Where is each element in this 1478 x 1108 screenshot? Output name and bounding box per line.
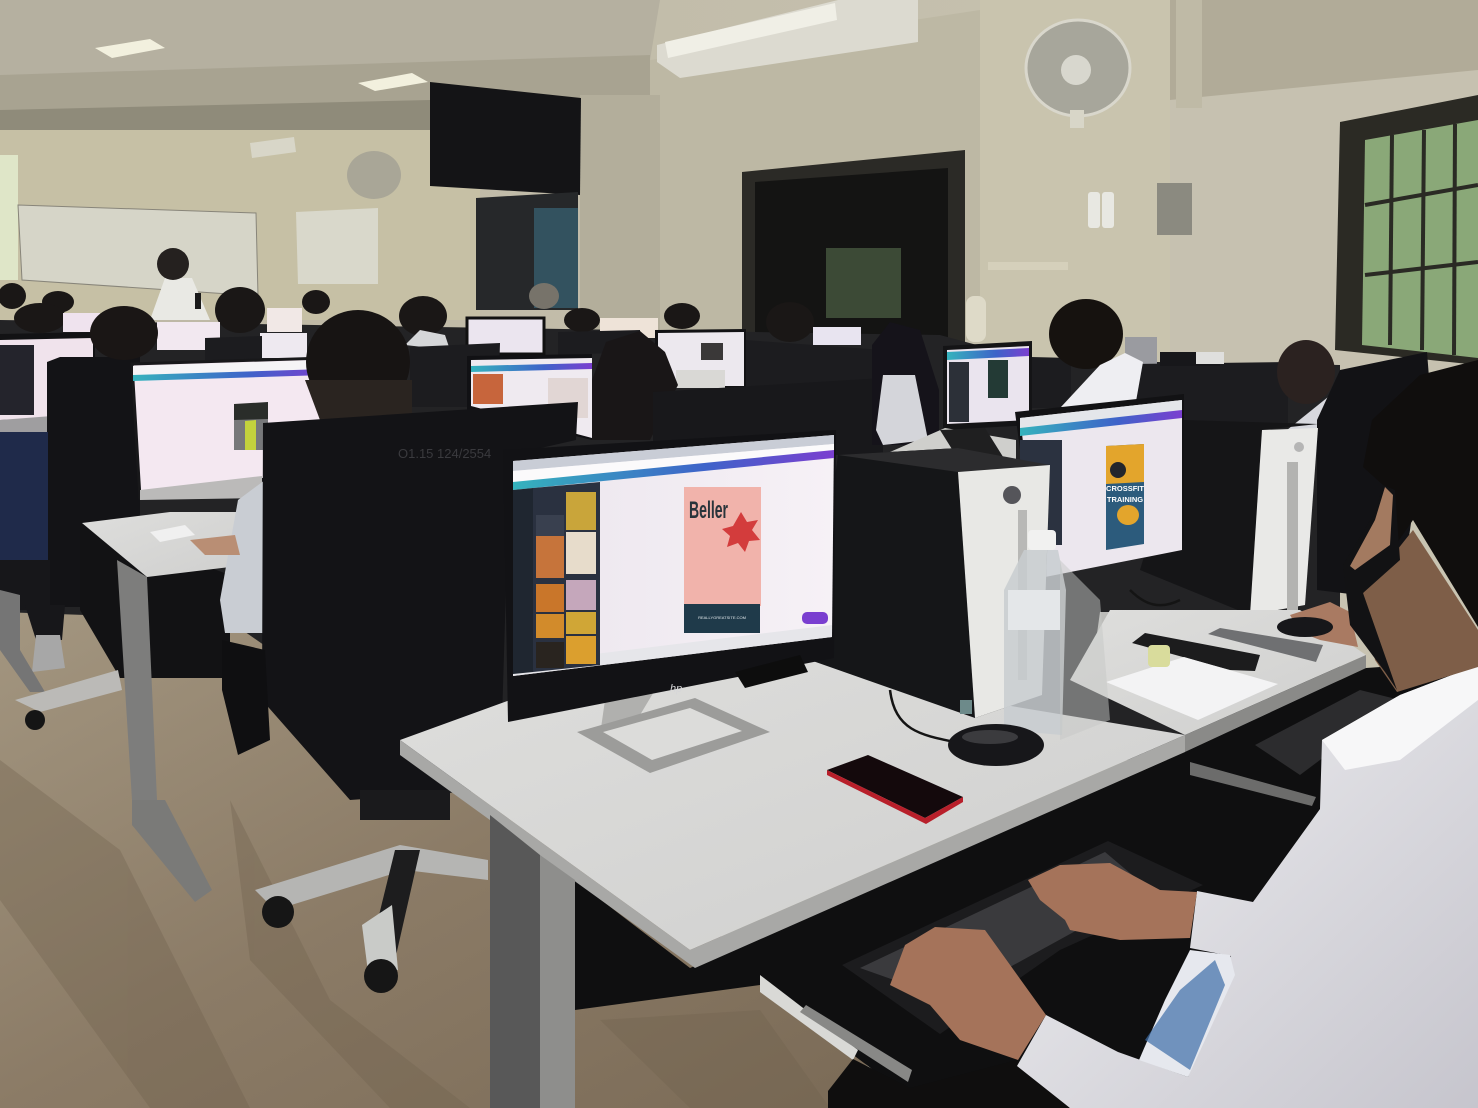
air conditioner main bbox=[657, 0, 918, 78]
main chair bbox=[222, 402, 578, 820]
right rear monitor bbox=[943, 341, 1032, 430]
mid-room dark band bbox=[0, 320, 1340, 760]
seated student: head and mask bbox=[1343, 360, 1478, 692]
wall switches bbox=[1088, 183, 1192, 235]
patterned bag bbox=[1139, 950, 1235, 1077]
dark trousers bbox=[828, 1059, 1070, 1108]
second desk bbox=[1070, 610, 1366, 735]
far left chair bbox=[0, 357, 230, 678]
small bottle bbox=[1148, 645, 1170, 667]
rear door bbox=[476, 192, 578, 310]
monitor: second row centre bbox=[467, 354, 592, 440]
crossfit poster: TRAINING bbox=[1107, 495, 1143, 504]
rear tray keyboard bbox=[1190, 690, 1400, 806]
main desk bbox=[400, 650, 1185, 1108]
mouse bbox=[948, 724, 1044, 766]
tray rail bbox=[760, 975, 912, 1082]
keyboard bbox=[842, 841, 1203, 1034]
left desk bbox=[0, 512, 247, 902]
keyboard second desk bbox=[1132, 633, 1260, 671]
rear cables and box bbox=[735, 655, 808, 688]
presenter bbox=[150, 248, 210, 320]
whiteboards bbox=[18, 205, 378, 296]
cable bbox=[890, 590, 1180, 742]
air conditioner rear bbox=[250, 137, 296, 158]
background students heads bbox=[0, 283, 814, 350]
monitor: crossfit bbox=[1015, 394, 1184, 648]
black chair behind seated student bbox=[1317, 352, 1430, 600]
rear tray and dark void bbox=[575, 660, 1478, 1090]
mouse and hand right bbox=[1277, 602, 1358, 647]
template thumbnails bbox=[533, 482, 600, 672]
double door bbox=[742, 150, 965, 345]
right tower rear bbox=[1140, 420, 1318, 615]
paper bbox=[1106, 657, 1278, 720]
conduit pipes bbox=[966, 0, 1202, 342]
crossfit poster: CROSSFIT bbox=[1106, 484, 1144, 493]
rear keyboard desk bbox=[890, 428, 1016, 470]
left monitor large bbox=[132, 358, 325, 500]
water bottle bbox=[1004, 530, 1110, 740]
ceiling lights bbox=[95, 39, 428, 91]
main monitor bbox=[503, 430, 836, 773]
student at main chair bbox=[190, 310, 412, 633]
rear fan bbox=[347, 151, 401, 199]
seated student: shirt bbox=[1017, 665, 1478, 1108]
chair base main bbox=[255, 845, 488, 993]
student head far left bbox=[90, 306, 158, 360]
student girl far right bbox=[1277, 340, 1335, 437]
editor sidebar bbox=[513, 488, 533, 674]
poster: Beller bbox=[684, 487, 761, 633]
student leg and sock far left bbox=[25, 605, 65, 672]
projector screen edge bbox=[0, 155, 18, 280]
hands bbox=[890, 863, 1197, 1060]
student: girl with long hair bbox=[872, 322, 939, 445]
crossfit poster bbox=[1106, 444, 1144, 550]
poster: Beller: REALLYGREATSITE.COM bbox=[698, 615, 746, 620]
background chairs bbox=[205, 330, 1288, 424]
monitor: rear row with white PC box bbox=[655, 329, 746, 388]
phone second desk bbox=[1208, 628, 1323, 662]
poster: Beller: Beller bbox=[689, 497, 728, 524]
television bbox=[430, 82, 581, 195]
student head right rear bbox=[1049, 299, 1143, 407]
monitor: far left rear bbox=[0, 332, 95, 438]
wall fan bbox=[1026, 20, 1130, 128]
chair: second row bbox=[653, 378, 883, 455]
chair base left bbox=[15, 670, 122, 730]
PC tower main bbox=[810, 448, 1050, 718]
main monitor: hp bbox=[670, 683, 682, 695]
student in second row with long hair bbox=[592, 331, 678, 440]
floor bbox=[0, 612, 910, 1108]
monitor stand bbox=[577, 690, 770, 773]
phone bbox=[827, 755, 963, 824]
background monitors bbox=[63, 308, 1157, 367]
window bbox=[1335, 95, 1478, 365]
floor planks bbox=[0, 760, 830, 1108]
main chair: O1.15 124/2554 bbox=[398, 446, 491, 461]
